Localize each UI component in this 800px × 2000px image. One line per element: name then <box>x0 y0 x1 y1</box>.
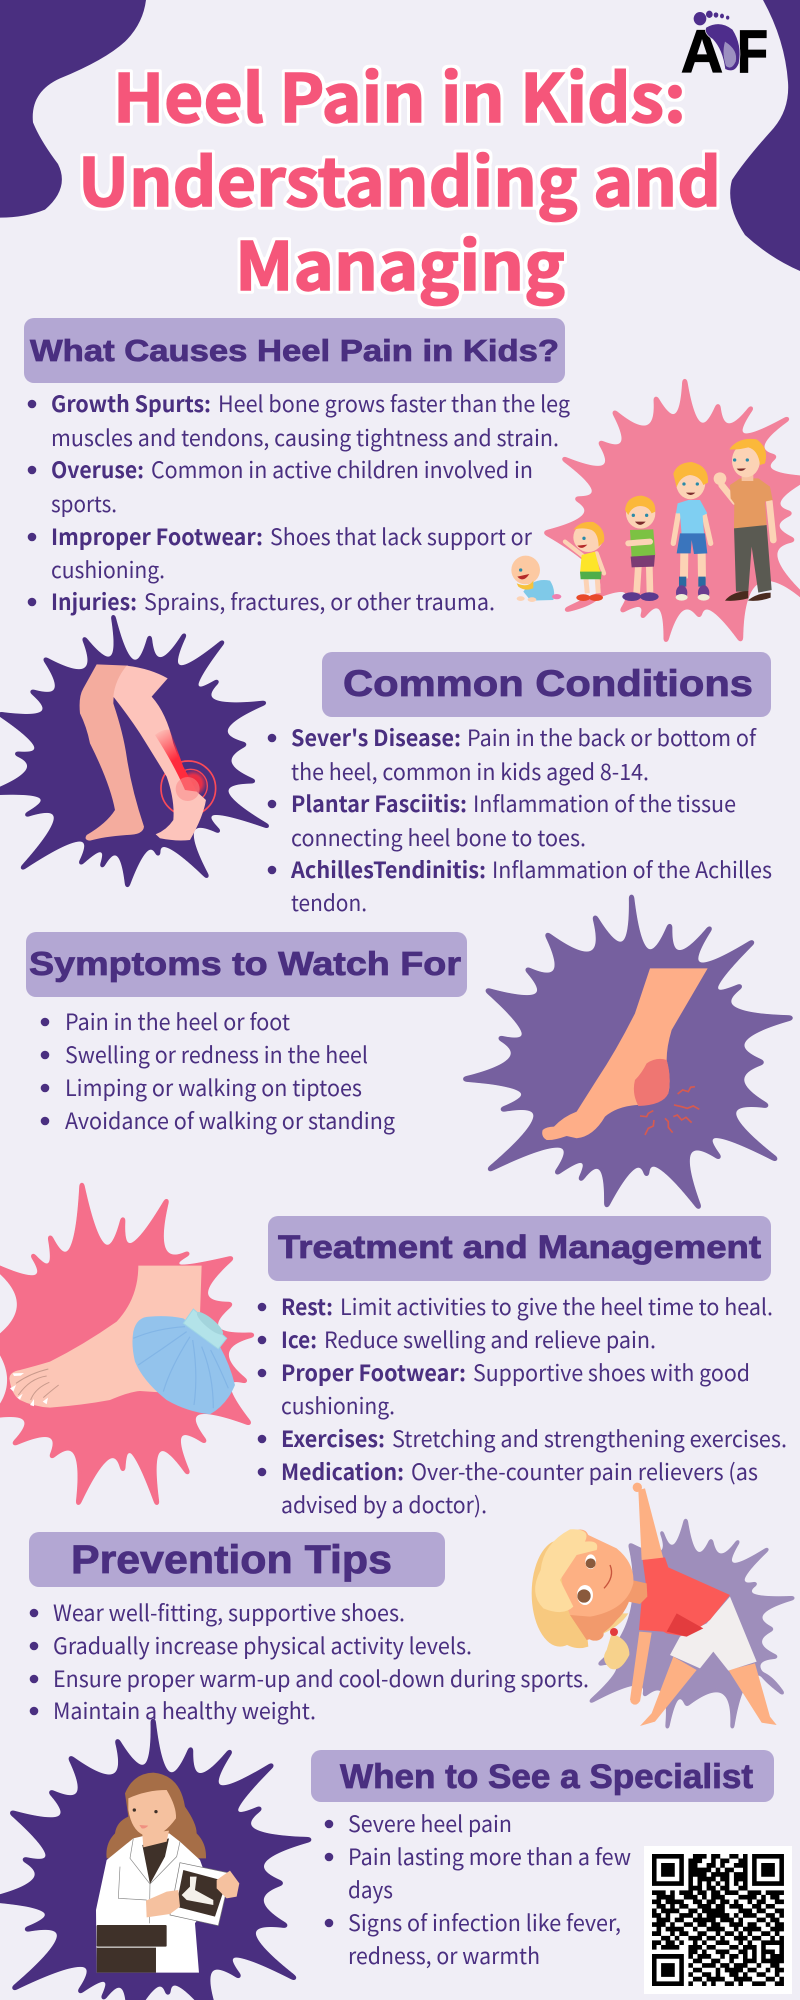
text block: conditions list: Inflammation of the tissue <box>473 787 736 819</box>
illustration: painful leg on purple splat <box>0 598 286 903</box>
heading: prevention: Prevention Tips <box>71 1538 392 1582</box>
text block: conditions list: tendon. <box>291 886 367 918</box>
heading: specialist <box>311 1750 774 1802</box>
text block: symptoms list: Limping or walking on tiptoes <box>65 1071 362 1103</box>
decorative blob: top left <box>0 0 146 218</box>
baby <box>511 556 561 602</box>
text block: symptoms list: Avoidance of walking or standing <box>65 1104 395 1136</box>
text block: symptoms list: Pain in the heel or foot <box>65 1005 290 1037</box>
text block: conditions list: Plantar Fasciitis: <box>291 787 467 819</box>
heading: symptoms <box>26 932 467 997</box>
text block: conditions list: Pain in the back or bottom of <box>467 721 757 753</box>
text block: specialist list: Pain lasting more than a few <box>348 1840 631 1872</box>
illustration: growing children on pink splat <box>511 381 800 640</box>
text block: treatment list: Rest: <box>281 1290 333 1322</box>
text block: causes list: Overuse: <box>51 453 144 485</box>
text block: prevention list: Gradually increase physical activity levels. <box>53 1629 472 1661</box>
text block: causes list <box>28 387 570 617</box>
title: Understanding and <box>78 130 721 226</box>
heading: what causes <box>24 318 565 383</box>
illustration: swollen heel on violet splat <box>465 897 791 1207</box>
panel: causes <box>24 318 800 640</box>
heading: common conditions: Common Conditions <box>343 663 753 704</box>
panel: common conditions <box>0 598 772 918</box>
QR code <box>644 1846 792 1994</box>
heading: what causes: What Causes Heel Pain in Kids? <box>30 333 559 368</box>
text block: treatment list: cushioning. <box>281 1389 395 1421</box>
panel: specialist <box>0 1721 792 2000</box>
text block: specialist list: days <box>348 1873 393 1905</box>
text block: causes list: Shoes that lack support or <box>270 520 532 552</box>
older boy <box>673 462 711 601</box>
text block: causes list: Growth Spurts: <box>51 387 211 419</box>
text block: causes list: Injuries: <box>51 585 137 617</box>
text block: conditions list <box>268 721 772 918</box>
text block: specialist list: Severe heel pain <box>348 1807 512 1839</box>
text block: treatment list: Supportive shoes with good <box>473 1356 750 1388</box>
title: Heel Pain in Kids: <box>113 46 686 142</box>
text block: causes list: Heel bone grows faster than the leg <box>218 387 570 419</box>
text block: treatment list: Limit activities to give the heel time to heal. <box>340 1290 773 1322</box>
text block: treatment list: Exercises: <box>281 1422 385 1454</box>
text block: conditions list: AchillesTendinitis: <box>290 853 486 885</box>
text block: treatment list: Medication: <box>281 1455 404 1487</box>
text block: symptoms list <box>41 1005 395 1136</box>
text block: prevention list: Ensure proper warm-up and cool-down during sports. <box>53 1662 589 1694</box>
text block: symptoms list: Swelling or redness in the heel <box>65 1038 368 1070</box>
text block: conditions list: connecting heel bone to toes. <box>291 821 586 853</box>
heading: specialist: When to See a Specialist <box>340 1758 753 1796</box>
panel: symptoms <box>26 897 791 1207</box>
text block: specialist list <box>325 1807 631 1971</box>
text block: specialist list: Signs of infection like fever, <box>348 1906 621 1938</box>
text block: prevention list <box>30 1596 589 1726</box>
text block: conditions list: Sever's Disease: <box>291 721 461 753</box>
text block: causes list: Sprains, fractures, or other trauma. <box>144 585 495 617</box>
text block: causes list: cushioning. <box>51 553 165 585</box>
text block: treatment list: Ice: <box>281 1323 317 1355</box>
heading: prevention <box>29 1532 445 1587</box>
text block: specialist list: redness, or warmth <box>348 1939 540 1971</box>
text block: treatment list: advised by a doctor). <box>281 1488 487 1520</box>
logo: F <box>737 18 768 85</box>
text block: causes list: Common in active children involved in <box>151 453 533 485</box>
man <box>714 439 773 601</box>
text block: treatment list: Reduce swelling and relieve pain. <box>324 1323 656 1355</box>
heading: treatment <box>268 1216 771 1281</box>
logo: A <box>681 18 723 85</box>
text block: causes list: sports. <box>51 487 117 519</box>
illustration: foot with ice pack on pink splat <box>0 1185 252 1503</box>
text block: prevention list: Wear well-fitting, supportive shoes. <box>53 1596 405 1628</box>
heading: treatment: Treatment and Management <box>278 1229 761 1265</box>
heading: common conditions <box>322 652 771 717</box>
decorative blob: top right <box>730 0 800 271</box>
middle boy <box>622 496 659 601</box>
title <box>78 46 721 310</box>
toddler <box>565 522 604 601</box>
logo <box>681 11 768 85</box>
heading: symptoms: Symptoms to Watch For <box>29 945 461 982</box>
text block: treatment list: Stretching and strengthening exercises. <box>392 1422 787 1454</box>
text block: treatment list: Over-the-counter pain relievers (as <box>411 1455 758 1487</box>
text block: conditions list: Inflammation of the Achilles <box>492 853 772 885</box>
illustration: stretching girl on lilac splat <box>532 1483 793 1727</box>
text block: treatment list <box>258 1290 787 1520</box>
illustration: doctor with x-ray on purple splat <box>0 1721 309 2000</box>
text block: causes list: muscles and tendons, causing tightness and strain. <box>51 421 559 453</box>
panel: prevention <box>29 1483 793 1727</box>
text block: conditions list: the heel, common in kids aged 8-14. <box>291 755 649 787</box>
text block: causes list: Improper Footwear: <box>51 520 263 552</box>
panel: treatment <box>0 1185 787 1520</box>
text block: prevention list: Maintain a healthy weight. <box>53 1694 316 1726</box>
title: Managing <box>235 214 565 310</box>
text block: treatment list: Proper Footwear: <box>281 1356 466 1388</box>
